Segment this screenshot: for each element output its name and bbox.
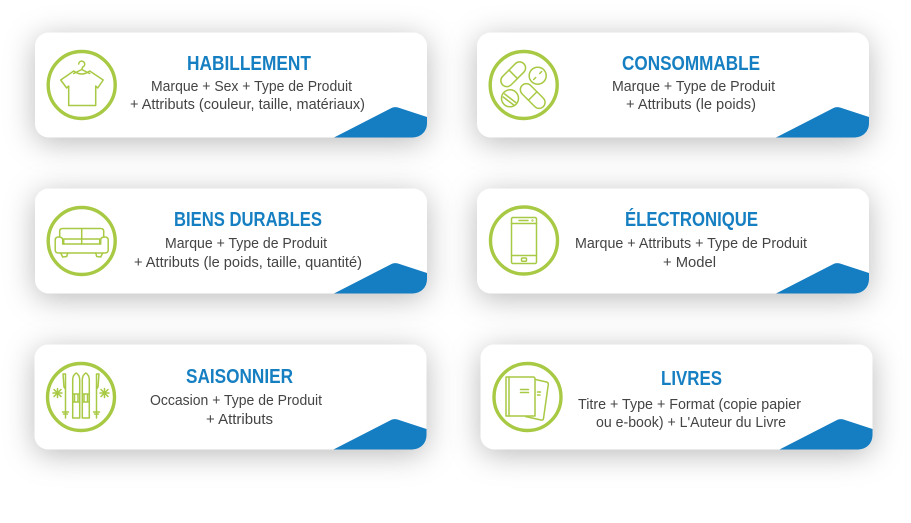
description: + Model (663, 254, 716, 271)
description: + Attributs (le poids) (626, 96, 756, 113)
card background (477, 188, 869, 294)
heading: BIENS DURABLES (174, 209, 322, 231)
icon: smartphone (490, 207, 558, 274)
panel: livres (480, 344, 872, 450)
heading: SAISONNIER (186, 366, 293, 388)
description: Marque + Attributs + Type de Produit (575, 235, 808, 252)
card background (35, 188, 427, 294)
icon: sofa (48, 208, 115, 274)
heading: ÉLECTRONIQUE (625, 208, 758, 231)
description: Marque + Sex + Type de Produit (151, 78, 353, 95)
description: + Attributs (le poids, taille, quantité) (134, 254, 362, 271)
heading: CONSOMMABLE (622, 53, 760, 75)
description: Occasion + Type de Produit (150, 392, 323, 409)
icon: books (494, 364, 561, 430)
heading: HABILLEMENT (187, 53, 311, 75)
panel: habillement (35, 32, 427, 138)
panel: biens durables (35, 188, 427, 294)
blue corner (334, 419, 426, 450)
panel: consommable (477, 32, 869, 138)
description: Marque + Type de Produit (612, 78, 776, 95)
description: Titre + Type + Format (copie papier (578, 396, 801, 413)
blue corner (334, 107, 427, 138)
blue corner (334, 263, 427, 294)
blue corner (776, 107, 869, 138)
heading: LIVRES (661, 368, 722, 390)
panel: saisonnier (34, 344, 426, 450)
icon: pills (490, 52, 557, 118)
blue corner (776, 263, 869, 294)
card background (480, 344, 872, 450)
icon: skis (48, 364, 114, 430)
blue corner (780, 419, 872, 450)
description: + Attributs (206, 411, 273, 428)
icon: t-shirt (48, 52, 115, 118)
description: Marque + Type de Produit (165, 235, 328, 252)
card background (34, 344, 426, 450)
description: + Attributs (couleur, taille, matériaux) (130, 96, 365, 113)
description: ou e-book) + L'Auteur du Livre (596, 414, 786, 431)
card background (477, 32, 869, 138)
panel: électronique (477, 188, 869, 294)
card background (35, 32, 427, 138)
